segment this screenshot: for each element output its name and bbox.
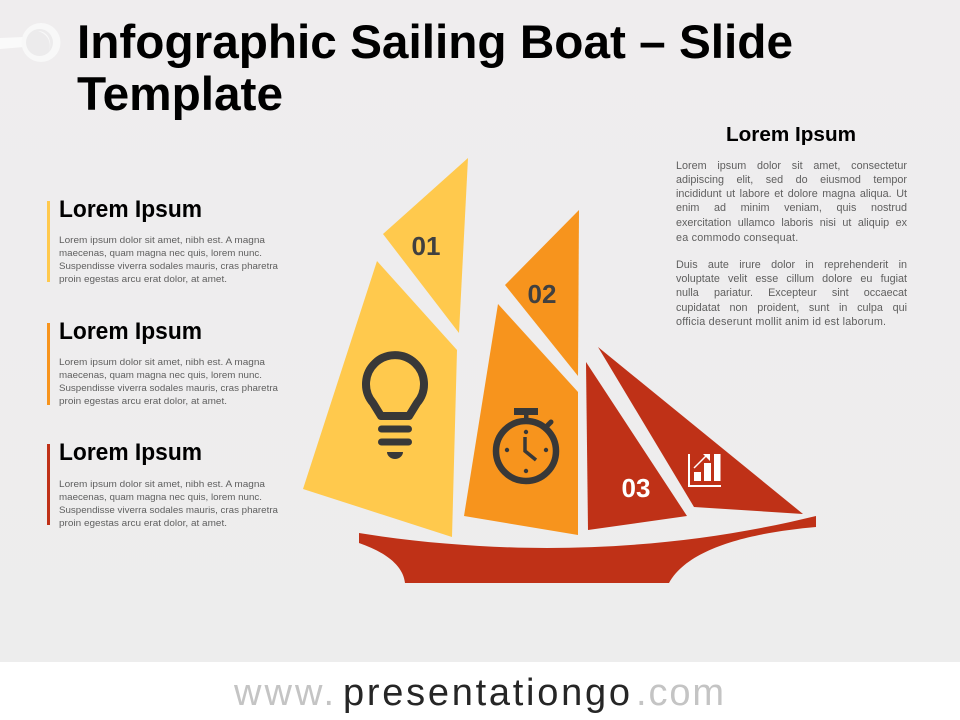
icon: ring and rope: [0, 23, 60, 62]
panel: right text: officia deserunt mollit anim id est laborum.: [676, 316, 886, 328]
panel: right text: exercitation ullamco laboris nisi ut aliquip ex: [676, 217, 907, 229]
panel: left item 2: proin egestas arcu erat dolor, at amet.: [59, 396, 227, 407]
title: [77, 15, 793, 120]
hull: [359, 516, 816, 583]
panel: left item 1: Lorem Ipsum: [59, 196, 202, 223]
panel: right text: adipiscing elit, sed do eiusmod tempor: [676, 174, 907, 186]
sail: orange top with 02: 02: [528, 279, 556, 309]
sail: yellow bottom with bulb: [303, 261, 457, 537]
panel: left item 2: [47, 318, 279, 407]
panel: left item 3: Lorem Ipsum: [59, 439, 202, 466]
sail: red left with 03: [586, 362, 687, 530]
panel: left item 3: Lorem ipsum dolor sit amet, nibh est. A magna: [59, 479, 266, 490]
panel: left item 1: maecenas, quam magna nec quis, lorem nunc.: [59, 248, 262, 259]
panel: left item 2: Lorem ipsum dolor sit amet, nibh est. A magna: [59, 357, 266, 368]
title: Template: [77, 67, 283, 120]
panel: right text: nulla pariatur. Excepteur sint occaecat: [676, 287, 907, 299]
footer url: [233, 672, 724, 714]
panel: right text: incididunt ut labore et dolore magna aliqua. Ut: [676, 188, 907, 200]
panel: left item 1: [47, 196, 279, 285]
panel: left item 3: [47, 439, 279, 529]
panel: right text: cupidatat non proident, sunt in culpa qui: [676, 302, 907, 314]
footer url: .com: [636, 672, 724, 714]
footer url: www.: [233, 672, 334, 714]
panel: left item 2: Lorem Ipsum: [59, 318, 202, 345]
panel: right text: [676, 160, 907, 328]
icon: stopwatch: [496, 408, 556, 481]
sail: red left with 03: 03: [622, 473, 650, 503]
panel: right text: ea commodo consequat.: [676, 232, 798, 244]
panel: right text: enim ad minim veniam, quis nostrud: [676, 202, 907, 214]
sail: orange bottom with stopwatch: [464, 304, 578, 535]
icon: light bulb: [366, 355, 424, 459]
panel: left item 1: proin egestas arcu erat dolor, at amet.: [59, 274, 227, 285]
panel: right text: Duis aute irure dolor in reprehenderit in: [676, 259, 907, 271]
title: Infographic Sailing Boat – Slide: [77, 15, 793, 68]
panel: left item 3: maecenas, quam magna nec quis, lorem nunc.: [59, 492, 262, 503]
panel: left item 1: Suspendisse viverra sodales mauris, cras pharetra: [59, 261, 279, 272]
sail: yellow top with 01: 01: [412, 231, 440, 261]
panel: left item 1: Lorem ipsum dolor sit amet, nibh est. A magna: [59, 235, 266, 246]
sail: yellow top with 01: [383, 158, 468, 333]
footer url: presentationgo: [343, 672, 630, 714]
panel: left item 3: proin egestas arcu erat dolor, at amet.: [59, 518, 227, 529]
sail: red right with chart icon: [598, 347, 803, 514]
panel: right text: voluptate velit esse cillum dolore eu fugiat: [676, 273, 907, 285]
panel: left item 3: Suspendisse viverra sodales mauris, cras pharetra: [59, 505, 279, 516]
panel: left item 2: Suspendisse viverra sodales mauris, cras pharetra: [59, 383, 279, 394]
panel: right text: Lorem ipsum dolor sit amet, consectetur: [676, 160, 907, 172]
panel: left item 2: maecenas, quam magna nec quis, lorem nunc.: [59, 370, 262, 381]
sail: orange top with 02: [505, 210, 579, 376]
icon: bar chart: [688, 454, 721, 487]
right heading: Lorem Ipsum: [726, 124, 856, 146]
